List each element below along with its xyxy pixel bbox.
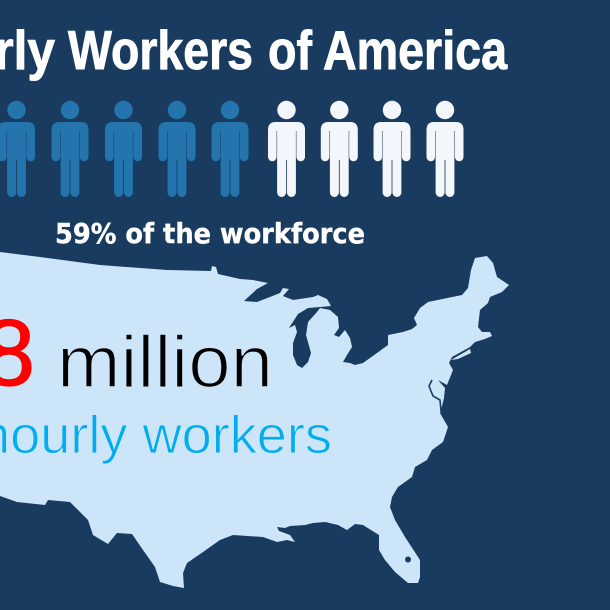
title: Workers: [68, 19, 253, 81]
Long Island: [451, 349, 471, 360]
map of the United States: [0, 252, 509, 588]
blue person icons: [0, 101, 248, 197]
title: [0, 19, 507, 81]
Lake Okeechobee: [405, 556, 411, 562]
title: America: [323, 19, 507, 81]
pictogram row of people: [0, 101, 464, 197]
title: of: [268, 19, 313, 81]
million label: million: [57, 322, 273, 403]
workforce percentage caption: 59% of the workforce: [55, 217, 365, 250]
white person icons: [268, 101, 464, 197]
Chesapeake Bay: [429, 380, 441, 411]
